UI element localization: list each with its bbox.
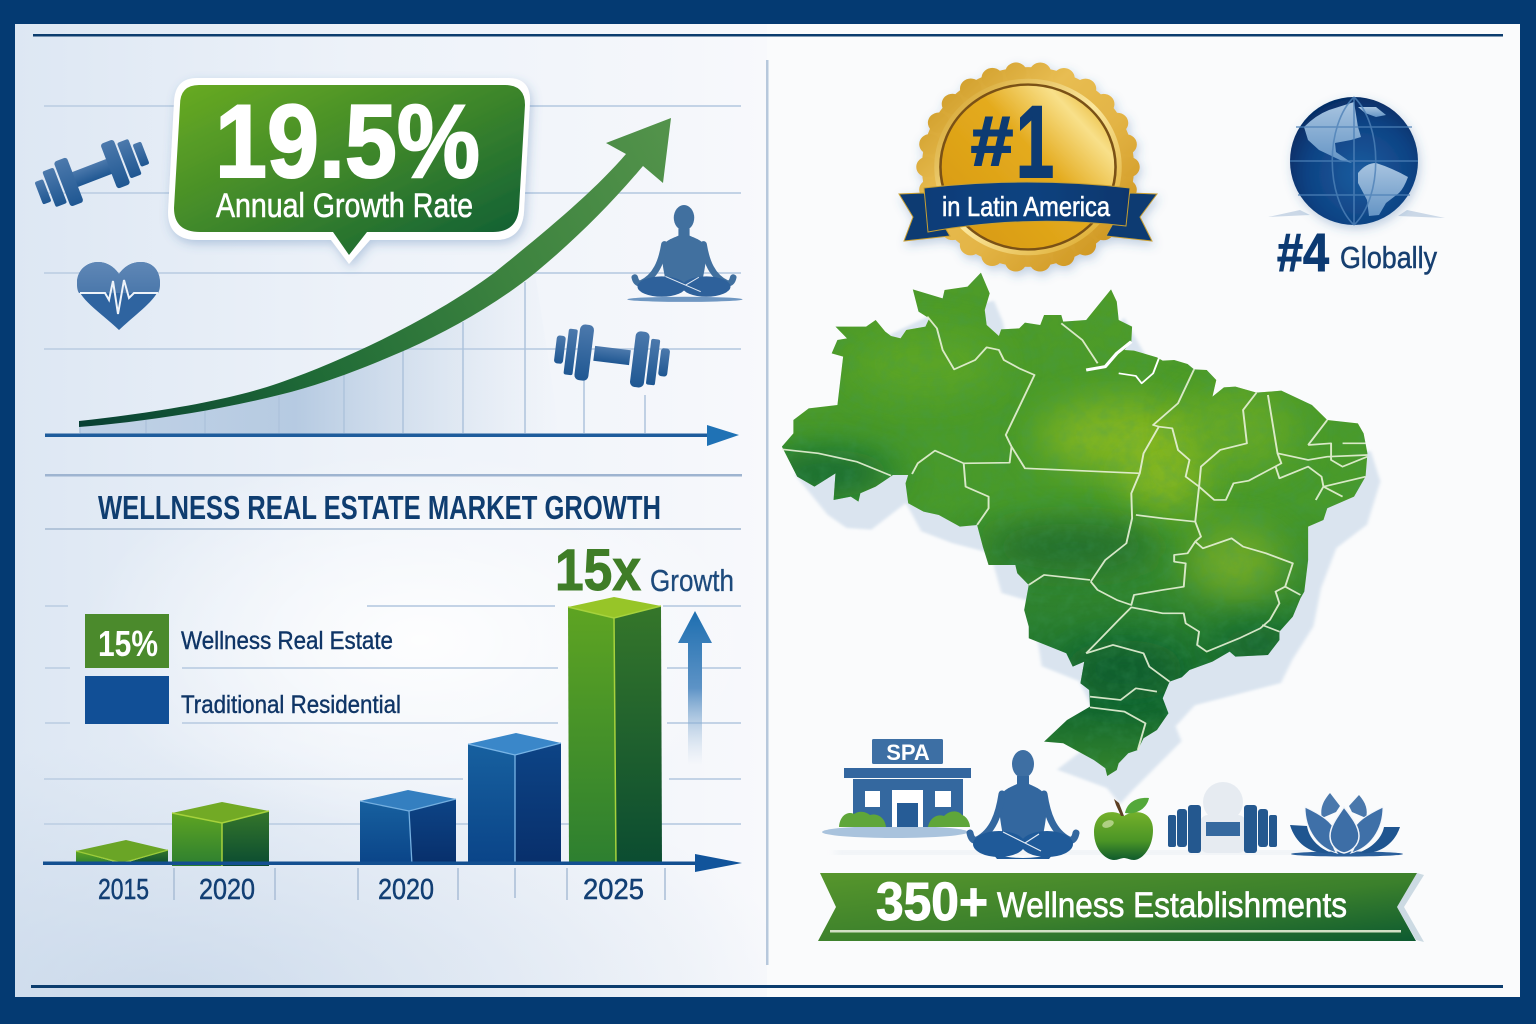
icon: lotus	[1290, 793, 1403, 856]
map land	[757, 270, 1380, 790]
bar: traditional 2	[468, 733, 561, 865]
map shadow	[795, 301, 1380, 804]
globe base wings	[1268, 210, 1445, 218]
icon: meditating figure small	[627, 205, 743, 302]
badge: #1 in Latin America	[899, 67, 1157, 267]
15x growth label: 15x	[555, 538, 641, 603]
up arrow	[678, 611, 712, 765]
growth curve arrow	[79, 118, 671, 427]
panel: annual growth chart	[30, 78, 743, 446]
banner count: 350+	[876, 872, 988, 932]
icon: spa building	[822, 739, 971, 838]
banner label: Wellness Establishments	[997, 886, 1347, 925]
state borders	[782, 317, 1367, 750]
ribbon	[899, 182, 1157, 241]
icon: apple	[1094, 798, 1153, 860]
chart gridlines	[44, 106, 741, 349]
year label 2025: 2025	[583, 874, 644, 906]
bar: 2015 wellness	[76, 840, 168, 864]
x axis arrow	[45, 425, 739, 446]
ribbon label: in Latin America	[942, 191, 1110, 222]
bar chart gridlines	[44, 606, 741, 824]
#1 text	[971, 85, 1054, 199]
banner: 350+ wellness establishments	[818, 872, 1424, 942]
icon: spa building: SPA	[886, 740, 930, 765]
icon: dumbbell tilted	[30, 130, 154, 216]
chart vertical ticks	[80, 282, 645, 433]
15x growth label	[555, 538, 734, 603]
medal ring	[934, 79, 1122, 255]
section rule top	[45, 474, 742, 476]
map of Brazil	[757, 270, 1380, 804]
icon: dumbbell lower	[552, 321, 672, 391]
legend swatch: traditional	[85, 676, 169, 724]
#1 text: 1	[1016, 85, 1054, 199]
wellness icons row	[822, 739, 1403, 860]
medal scalloped edge	[922, 67, 1134, 267]
banner ribbon	[818, 873, 1417, 941]
#1 text: #	[971, 102, 1013, 180]
bar: 2025 wellness tall	[568, 597, 662, 865]
legend label: traditional: Traditional Residential	[181, 691, 401, 719]
big number: 19.5%	[215, 84, 480, 200]
legend label: wellness: Wellness Real Estate	[181, 627, 393, 655]
icon: dumbbell with backdrop	[1168, 782, 1277, 853]
panel: wellness real estate market growth	[43, 474, 742, 906]
callout: 19.5% annual growth rate	[168, 78, 530, 264]
legend swatch: wellness	[85, 614, 169, 668]
15x growth label: Growth	[650, 563, 734, 598]
medal face	[940, 85, 1116, 249]
banner underline	[830, 930, 1401, 932]
x axis arrow	[43, 854, 742, 872]
section rule bottom	[45, 528, 741, 530]
shaded area under growth curve	[80, 273, 560, 435]
amazon delta	[1086, 342, 1159, 383]
label: #4: #4	[1277, 223, 1329, 283]
banner shadow fold	[1397, 873, 1424, 942]
legend	[85, 614, 401, 724]
icon: meditating figure large	[970, 750, 1076, 859]
legend swatch: wellness: 15%	[98, 623, 158, 664]
callout label: Annual Growth Rate	[216, 187, 473, 225]
icon: globe	[1290, 97, 1418, 225]
bar: 2020 wellness	[172, 802, 269, 866]
axis ticks	[174, 868, 665, 900]
icon: heart with pulse	[77, 262, 160, 330]
map fill and shading	[757, 270, 1380, 790]
ground shadow	[835, 851, 1395, 854]
center divider	[766, 60, 768, 965]
bar: traditional 1	[360, 790, 456, 865]
bottom rule	[31, 985, 1503, 988]
year label 2015: 2015	[98, 874, 149, 906]
top rule	[33, 34, 1503, 36]
globe with #4 globally	[1268, 97, 1445, 283]
label: globally: Globally	[1340, 240, 1437, 275]
year label 2020 second: 2020	[378, 874, 434, 906]
heading: WELLNESS REAL ESTATE MARKET GROWTH	[98, 489, 661, 526]
year label 2020: 2020	[199, 874, 255, 906]
